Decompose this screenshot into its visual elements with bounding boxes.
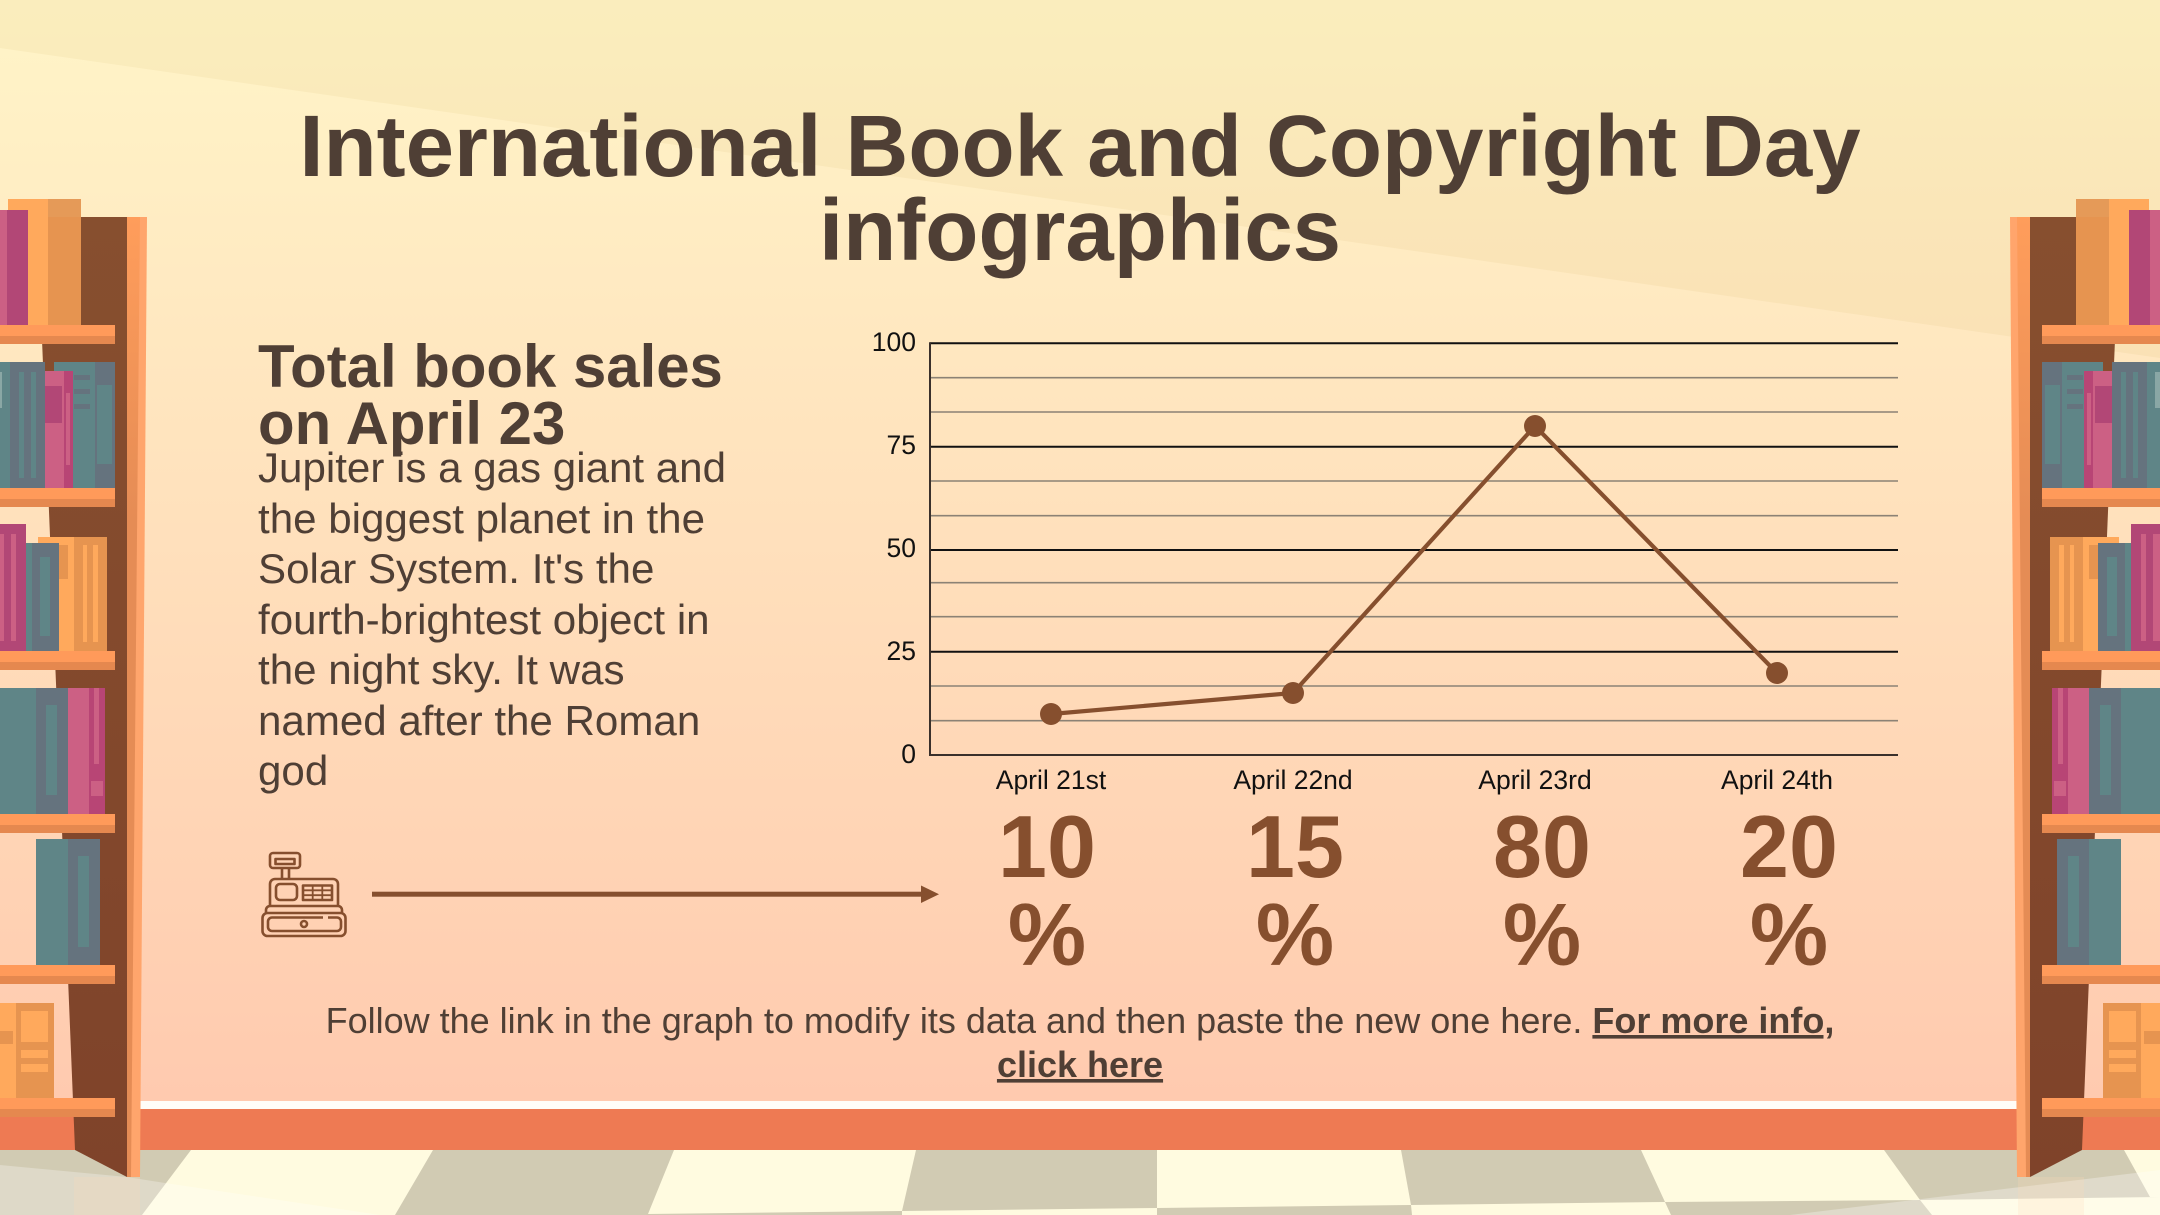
shelf side post (127, 217, 147, 1177)
footer note: click here (997, 1044, 1163, 1085)
y axis labels (872, 327, 916, 769)
y axis labels: 100 (872, 327, 916, 357)
major grid lines and axes (930, 342, 1898, 756)
body text: named after the Roman (258, 697, 700, 744)
y axis labels: 0 (901, 739, 916, 769)
right shelf back panel (2030, 217, 2120, 1177)
arrow (372, 886, 939, 903)
value: 20%: % (1750, 885, 1828, 984)
shelf planks (0, 325, 115, 1117)
x axis labels: April 24th (1721, 765, 1833, 795)
books row 2 (0, 362, 115, 488)
right books row 2 (2042, 362, 2160, 488)
books row 6 (0, 1003, 54, 1098)
value: 10%: % (1008, 885, 1086, 984)
body text: god (258, 747, 328, 794)
x axis labels: April 21st (996, 765, 1107, 795)
right shelf planks (2042, 325, 2160, 1117)
shelf back panel (37, 217, 127, 1177)
minor grid lines (930, 378, 1898, 721)
white skirting strip (0, 1101, 2160, 1109)
body text: fourth-brightest object in (258, 596, 710, 643)
y axis labels: 50 (887, 533, 916, 563)
y axis labels: 75 (887, 430, 916, 460)
percentage values (998, 797, 1838, 984)
value: 15%: 15 (1246, 797, 1344, 896)
body text: Solar System. It's the (258, 545, 654, 592)
value: 80%: 80 (1493, 797, 1591, 896)
x axis labels (996, 765, 1833, 795)
x axis labels: April 23rd (1478, 765, 1592, 795)
orange skirting board (0, 1109, 2160, 1150)
body text: the biggest planet in the (258, 495, 705, 542)
books row 5 (36, 839, 100, 965)
right books row 4 (2052, 688, 2160, 814)
body text: the night sky. It was (258, 646, 625, 693)
right books row 3 (2050, 524, 2160, 651)
books row 1 (0, 199, 81, 325)
value: 20%: 20 (1740, 797, 1838, 896)
value: 80%: % (1503, 885, 1581, 984)
books row 4 (0, 688, 105, 814)
heading: total book sales: on April 23 (258, 390, 565, 457)
x axis labels: April 22nd (1233, 765, 1353, 795)
value: 10%: 10 (998, 797, 1096, 896)
right books row 1 (2076, 199, 2160, 325)
title: infographics (819, 182, 1341, 279)
checkered floor (0, 1150, 2160, 1215)
line chart (872, 327, 1898, 795)
title: International Book and Copyright Day (299, 98, 1861, 195)
value: 15%: % (1256, 885, 1334, 984)
bookshelf: left (0, 199, 147, 1177)
y axis labels: 25 (887, 636, 916, 666)
bookshelf: right (2010, 199, 2160, 1177)
right books row 5 (2057, 839, 2121, 965)
data line (1040, 415, 1788, 725)
icon: cash register (262, 853, 346, 936)
footer note: Follow the link in the graph to modify its data and then paste the new one here. For more info, (326, 1000, 1834, 1041)
books row 3 (0, 524, 107, 651)
right shelf side post (2010, 217, 2030, 1177)
heading: total book sales: Total book sales (258, 333, 723, 400)
right books row 6 (2103, 1003, 2160, 1098)
body text: Jupiter is a gas giant and (258, 444, 726, 491)
background: diagonal light shape (0, 0, 2160, 358)
